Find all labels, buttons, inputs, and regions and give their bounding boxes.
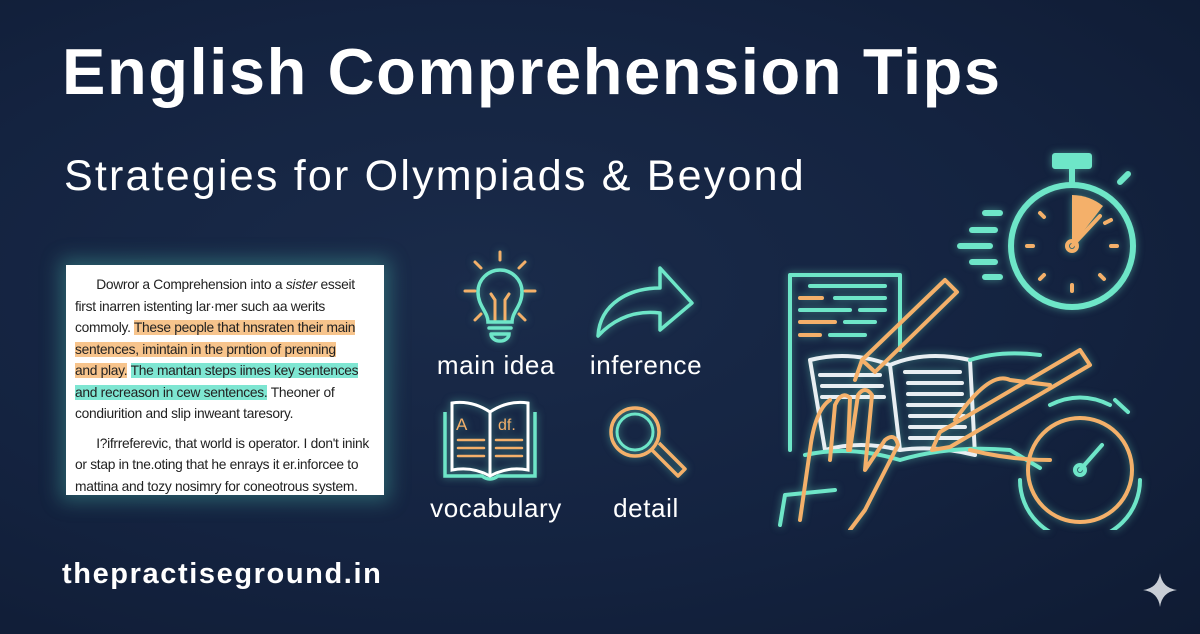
label: main idea: main idea	[437, 350, 555, 380]
text passage with highlights: Dowror a Comprehension into a sister esseit	[96, 277, 355, 292]
text passage with highlights: sentences, imintain in the prntion of prenning	[75, 342, 336, 356]
label: vocabulary: vocabulary	[430, 493, 562, 523]
subtitle: Strategies for Olympiads & Beyond	[64, 152, 806, 200]
text passage with highlights: mattina and tozy nosimry for coneotrous system.	[75, 478, 358, 494]
text passage with highlights: commoly. These people that hnsraten their main	[75, 320, 355, 335]
icon: open book	[438, 396, 542, 485]
pencils	[855, 280, 1090, 460]
icon: open book: df.	[498, 417, 516, 434]
book	[810, 356, 975, 455]
text passage with highlights: and recreason in cew sentences. Theoner of	[75, 384, 334, 400]
icon: sparkle	[1143, 573, 1177, 607]
icon: curved arrow	[592, 264, 697, 340]
document	[790, 275, 900, 450]
text passage with highlights: first inarren istenting lar·mer such aa werits	[75, 298, 325, 314]
title: English Comprehension Tips	[62, 35, 1002, 108]
left hand	[800, 390, 898, 530]
text passage with highlights: or stap in tne.oting that he enrays it er.inforcee to	[75, 457, 358, 472]
text passage with highlights	[66, 265, 384, 495]
icon: magnifying glass	[604, 402, 690, 481]
label: inference: inference	[590, 350, 702, 380]
text passage with highlights: condiurition and slip inweant taresory. I?ifrreferevic, that world is operator. I don't inink	[75, 406, 369, 450]
icon: open book: A	[456, 415, 468, 434]
top stopwatch	[960, 156, 1133, 307]
label: detail: detail	[613, 493, 679, 523]
text passage with highlights: and play. The mantan steps iimes key sentences	[75, 363, 358, 378]
footer website: thepractiseground.in	[62, 558, 382, 590]
icon: light bulb	[462, 249, 538, 347]
illustration: stopwatch, document, book, hands, pencils	[774, 148, 1146, 534]
bottom stopwatch	[1028, 418, 1132, 522]
